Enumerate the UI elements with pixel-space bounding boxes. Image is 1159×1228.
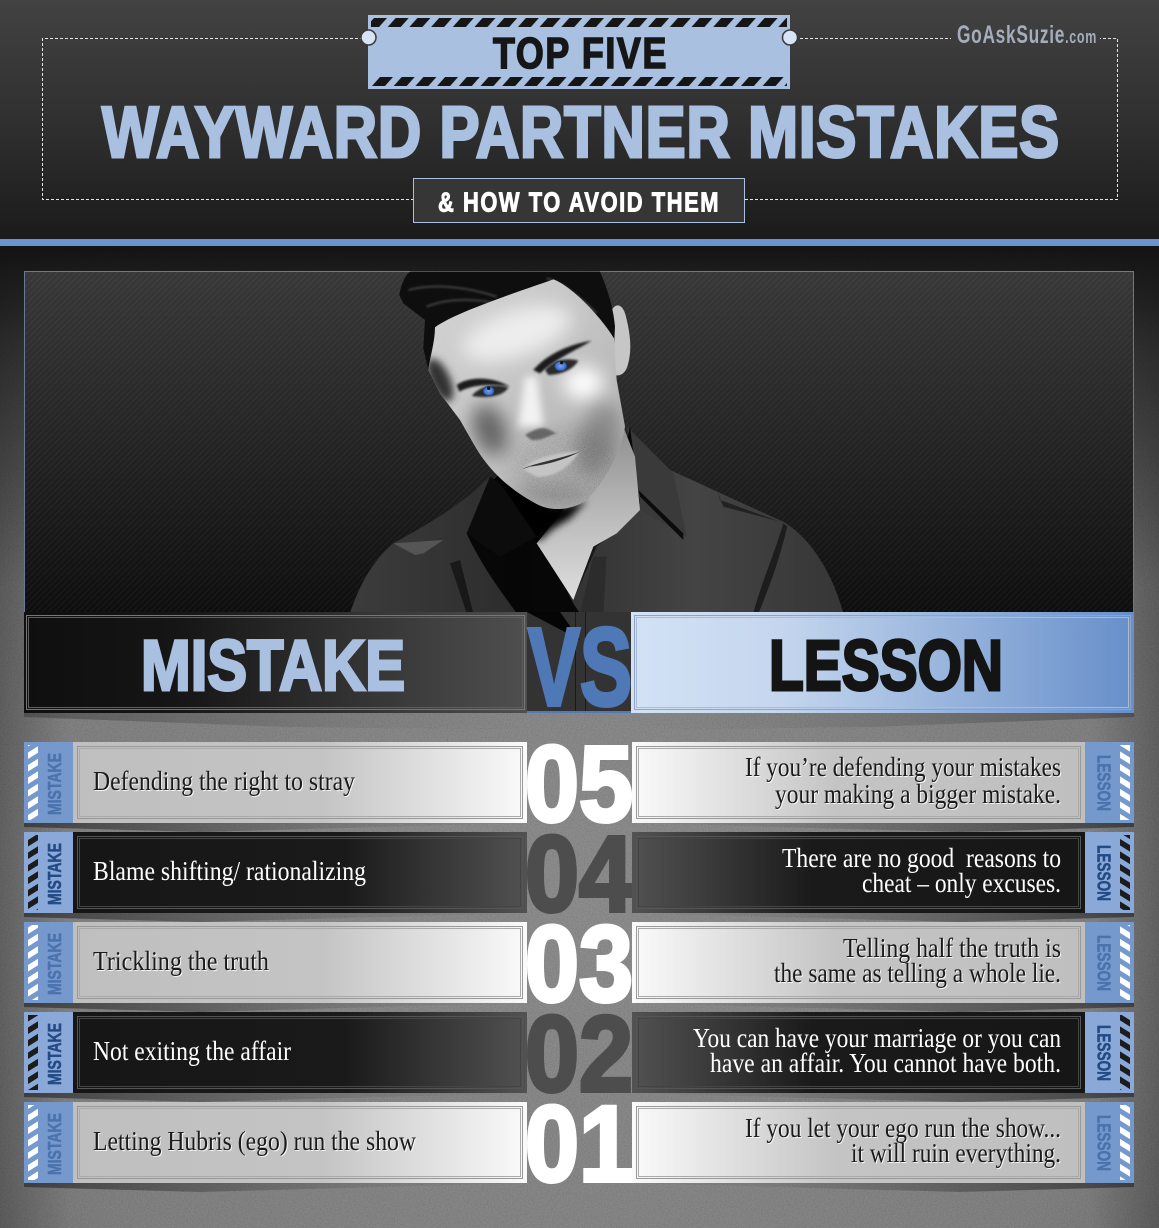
row 02 number: 02: [525, 993, 633, 1114]
row 04 mistake tab: MISTAKE: [45, 843, 65, 905]
banner: top five: [361, 15, 798, 89]
row 04 lesson panel: [632, 832, 1085, 913]
row 01 lesson panel: [632, 1102, 1085, 1183]
row 05 lesson tab: LESSON: [1094, 755, 1114, 811]
mistake heading panel: MISTAKE: [141, 627, 405, 706]
face shading: [428, 299, 624, 509]
row 05 mistake panel: [73, 742, 527, 823]
row 01 number: 01: [525, 1083, 633, 1204]
logo: GoAskSuzie.com: GoAskSuzie.com: [957, 21, 1097, 49]
row 04 mistake panel: [73, 832, 527, 913]
row 04 shadow: [24, 913, 1134, 922]
row 01 lesson tab: [1085, 1102, 1134, 1183]
hair: [399, 272, 615, 402]
left collar: [467, 477, 537, 557]
heading shadow: [24, 713, 1134, 730]
row 01 mistake panel: [73, 1102, 527, 1183]
lesson heading panel: [631, 612, 1134, 713]
row 02 lesson panel: [632, 1012, 1085, 1093]
banner: top five: TOP FIVE: [493, 29, 668, 78]
VS mark: VS: [528, 606, 632, 729]
face: [428, 279, 625, 509]
row 03 lesson panel: [632, 922, 1085, 1003]
row 01 lesson panel: it will ruin everything.: [851, 1138, 1061, 1168]
eye sockets: [472, 359, 578, 397]
row 05: [24, 723, 1134, 844]
row 05 lesson panel: your making a bigger mistake.: [775, 779, 1061, 809]
row 02 lesson panel: You can have your marriage or you can: [693, 1023, 1061, 1053]
row 02 mistake panel: [73, 1012, 527, 1093]
subtitle box: & HOW TO AVOID THEM: [438, 186, 720, 218]
hero panel: [24, 272, 1134, 613]
row 04 lesson tab: [1085, 832, 1134, 913]
row 02 lesson tab: LESSON: [1094, 1025, 1114, 1081]
row 05 lesson tab: [1085, 742, 1134, 823]
row 01 mistake panel: Letting Hubris (ego) run the show: [93, 1126, 416, 1156]
row 03 mistake tab: [24, 922, 73, 1003]
eyebrows: [457, 341, 592, 392]
neck and chest: [537, 427, 640, 600]
row 02: [24, 993, 1134, 1114]
centre column behind VS: [527, 612, 632, 713]
shirt: [350, 427, 843, 613]
row 04 mistake tab: [24, 832, 73, 913]
page background: [0, 246, 1159, 1228]
row 04 lesson tab: LESSON: [1094, 845, 1114, 901]
row 02 mistake tab: MISTAKE: [45, 1023, 65, 1085]
row 03 lesson tab: LESSON: [1094, 935, 1114, 991]
row 04 number: 04: [525, 813, 633, 934]
row 05 shadow: [24, 823, 1134, 832]
shirt shadows and folds: [393, 427, 787, 613]
ear: [612, 305, 630, 375]
row 03: [24, 903, 1134, 1024]
eyes: [483, 361, 567, 396]
nose: [525, 428, 557, 440]
row 03 number: 03: [525, 903, 633, 1024]
row 01 shadow: [24, 1183, 1134, 1192]
row 01: [24, 1083, 1134, 1204]
row 03 mistake panel: Trickling the truth: [93, 946, 269, 976]
subtitle box: [414, 178, 744, 222]
row 02 lesson tab: [1085, 1012, 1134, 1093]
row 03 mistake tab: MISTAKE: [45, 933, 65, 995]
row 04 lesson panel: cheat – only excuses.: [862, 868, 1061, 898]
row 01 mistake tab: MISTAKE: [45, 1113, 65, 1175]
row 03 lesson panel: the same as telling a whole lie.: [774, 958, 1061, 988]
row 04 lesson panel: There are no good reasons to: [782, 843, 1061, 873]
row 02 shadow: [24, 1093, 1134, 1102]
row 01 mistake tab: [24, 1102, 73, 1183]
row 02 mistake tab: [24, 1012, 73, 1093]
row 05 mistake panel: Defending the right to stray: [93, 766, 355, 796]
mistake heading panel: [24, 612, 527, 713]
header band: [0, 0, 1159, 246]
lesson heading panel: LESSON: [769, 627, 1003, 706]
row 05 lesson panel: If you’re defending your mistakes: [745, 752, 1061, 782]
row 04: [24, 813, 1134, 934]
row 01 lesson panel: If you let your ego run the show...: [745, 1113, 1061, 1143]
row 02 lesson panel: have an affair. You cannot have both.: [710, 1048, 1061, 1078]
row 05 lesson panel: [632, 742, 1085, 823]
dotted header frame: [42, 38, 1118, 200]
lips: [522, 452, 580, 477]
row 03 lesson panel: Telling half the truth is: [843, 933, 1061, 963]
row 03 mistake panel: [73, 922, 527, 1003]
row 05 mistake tab: [24, 742, 73, 823]
row 02 mistake panel: Not exiting the affair: [93, 1036, 291, 1066]
row 05 mistake tab: MISTAKE: [45, 753, 65, 815]
row 01 lesson tab: LESSON: [1094, 1115, 1114, 1171]
row 03 lesson tab: [1085, 922, 1134, 1003]
row 03 shadow: [24, 1003, 1134, 1012]
portrait: man: [350, 272, 843, 613]
row 04 mistake panel: Blame shifting/ rationalizing: [93, 856, 366, 886]
jaw shadow on neck: [497, 477, 587, 542]
row 05 number: 05: [525, 723, 633, 844]
